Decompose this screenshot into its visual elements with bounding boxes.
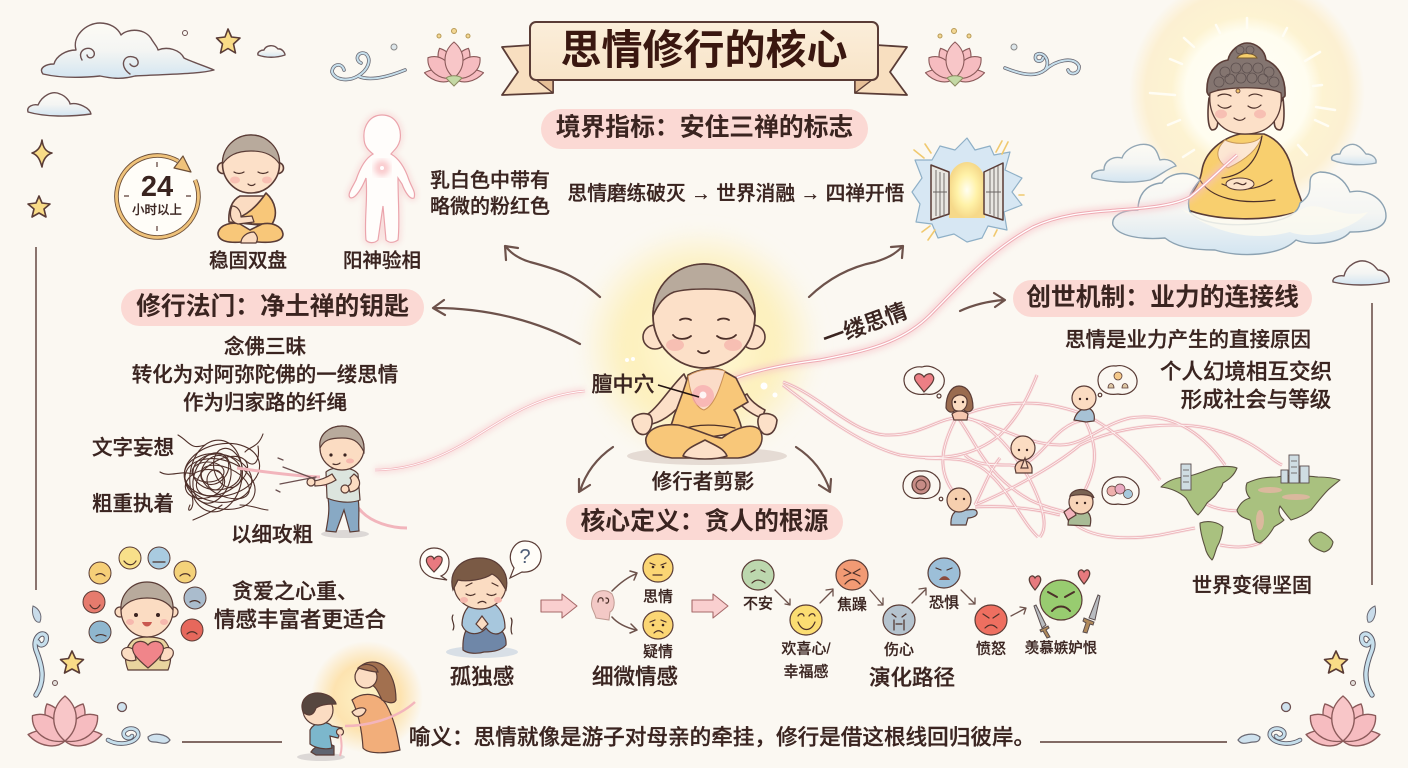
- heading: practice method: 修行法门：净土禅的钥匙: [136, 292, 409, 320]
- bottom left line: [182, 741, 282, 743]
- heading: realm indicators: [541, 109, 868, 149]
- monk with emotion bubbles: [83, 547, 206, 670]
- mother: [352, 694, 400, 753]
- cloud seat: [1113, 172, 1386, 255]
- pink thread to the left: [375, 391, 585, 470]
- decoration: bottom right corner: [1238, 606, 1382, 749]
- text: milky white with pink: 乳白色中带有: [430, 169, 550, 192]
- pointer line: [658, 385, 699, 397]
- heading: realm indicators: 境界指标：安住三禅的标志: [556, 114, 853, 142]
- decoration: swirl near title left: [332, 44, 405, 79]
- title banner: [502, 22, 907, 95]
- label: fine over gross: 以细攻粗: [231, 524, 313, 546]
- decoration: swirl near title right: [1005, 44, 1079, 74]
- australia: [1309, 532, 1333, 552]
- central monk glow: [580, 227, 820, 463]
- halo: [1129, 0, 1365, 210]
- glow: [311, 641, 423, 753]
- small arrows: [775, 588, 1026, 616]
- face: thought: [643, 554, 673, 582]
- text: milky white with pink: [430, 169, 550, 218]
- label: envy and hate: 羡慕嫉妒恨: [1025, 640, 1097, 657]
- label: practitioner silhouette: 修行者剪影: [652, 470, 754, 494]
- central monk: [625, 264, 787, 465]
- swords: [1034, 595, 1100, 638]
- face: agitation: [836, 560, 868, 590]
- south america: [1200, 522, 1223, 560]
- thread through scissors: [237, 468, 407, 528]
- body: [463, 622, 506, 653]
- arrow: to practice: [433, 300, 580, 344]
- thread network: [783, 375, 1282, 547]
- face: joy: [790, 605, 822, 635]
- text: suitable for emotional people: 情感丰富者更适合: [214, 608, 386, 632]
- label: 小时以上: [132, 203, 182, 217]
- speech bubble: question: [510, 541, 541, 578]
- chart: emotion evolution path: [742, 558, 1100, 680]
- africa and eurasia: [1237, 475, 1340, 543]
- text: buddha recitation: [132, 334, 398, 414]
- label: word delusion: 文字妄想: [92, 436, 174, 460]
- text: suitable for emotional people: 贪爱之心重、: [232, 580, 358, 604]
- block arrow 1: [541, 594, 577, 618]
- arrow: to thought: [612, 571, 637, 591]
- text: metaphor: 喻义：思情就像是游子对母亲的牵挂，修行是借这根线回归彼岸。: [409, 724, 1035, 750]
- hearts: [1029, 570, 1090, 590]
- north america: [1161, 466, 1237, 515]
- heart: [133, 641, 163, 668]
- icon: head with swirl: [591, 591, 614, 620]
- text: karma direct cause: 思情是业力产生的直接原因: [1065, 328, 1311, 352]
- label: unease: 不安: [743, 596, 773, 612]
- label: a strand of thought: 一缕思情: [819, 298, 911, 352]
- heading: core definition: [566, 504, 843, 540]
- text: milky white with pink: 略微的粉红色: [430, 195, 550, 218]
- arrow: down right: [796, 447, 831, 492]
- decoration: bottom left corner: [26, 606, 170, 749]
- head: [653, 264, 755, 368]
- label: doubt feeling: 疑情: [643, 644, 673, 660]
- ears: [643, 325, 667, 349]
- face: anger: [975, 605, 1007, 635]
- heading: creation mechanism: 创世机制：业力的连接线: [1026, 284, 1299, 312]
- arrow: to doubt: [612, 617, 637, 633]
- label: loneliness: 孤独感: [450, 665, 514, 689]
- label: joy: 幸福感: [783, 664, 829, 680]
- text: suitable for emotional people: [214, 580, 386, 632]
- label: agitation: 焦躁: [837, 596, 867, 614]
- decoration: right small cloud: [1333, 261, 1389, 285]
- label: sadness: 伤心: [884, 642, 914, 658]
- tangle of thoughts: [160, 434, 268, 520]
- person: boy with tangle bubble: [903, 471, 977, 525]
- Buddha on cloud: [1092, 0, 1386, 255]
- label: joy: 欢喜心/: [781, 640, 831, 658]
- face: sadness: [883, 605, 915, 635]
- head: [1208, 98, 1284, 130]
- speech bubble: heart: [420, 548, 449, 580]
- panel: clock 24 hours: [116, 155, 198, 237]
- face: unease: [742, 560, 774, 590]
- label: subtle emotion: 细微情感: [592, 665, 678, 689]
- icon: opening doors: [912, 138, 1024, 242]
- child: [297, 753, 345, 761]
- head: [454, 561, 506, 609]
- right side cloud: [1332, 144, 1376, 165]
- icon: lotus top right: [924, 28, 986, 86]
- text: illusions interweave: 个人幻境相互交织: [1160, 360, 1332, 384]
- arrow: to realm: [505, 246, 600, 297]
- arms: [648, 374, 692, 424]
- person: centre praying: [1011, 436, 1035, 473]
- icon: small seated monk: [218, 135, 284, 243]
- heading: practice method: [121, 289, 424, 326]
- block arrow 2: [692, 594, 728, 618]
- label: evolution path: 演化路径: [869, 666, 955, 690]
- label: world becomes solid: 世界变得坚固: [1192, 574, 1312, 597]
- boy with scissors: [276, 426, 369, 538]
- legs: [646, 425, 762, 458]
- text: buddha recitation: 转化为对阿弥陀佛的一缕思情: [132, 364, 398, 386]
- title text: 思情修行的核心: [560, 27, 848, 73]
- lonely boy: [420, 541, 541, 658]
- label: yang spirit verification: 阳神验相: [343, 250, 421, 272]
- face: envy and hate: [1040, 580, 1082, 620]
- label: gross attachment: 粗重执着: [92, 492, 174, 516]
- face: doubt: [643, 611, 673, 639]
- label: fear: 恐惧: [929, 594, 959, 612]
- hands: [632, 414, 652, 434]
- label: joy: [781, 640, 831, 680]
- bottom right line: [1040, 741, 1227, 743]
- shadow: [627, 447, 787, 465]
- icon: scissors: [276, 458, 316, 492]
- face: [673, 318, 736, 353]
- pink thread to buddha: [700, 155, 1237, 397]
- chest: [688, 369, 725, 410]
- text: buddha recitation: 作为归家路的纤绳: [183, 392, 347, 414]
- right border line: [1371, 303, 1373, 585]
- label: anger: 愤怒: [976, 640, 1006, 658]
- person: man with bubble: [1064, 477, 1139, 526]
- text: illusions interweave: 形成社会与等级: [1181, 388, 1331, 412]
- sparkles: [625, 357, 778, 398]
- arrow: to creation: [960, 293, 1005, 311]
- foot: [683, 440, 727, 459]
- person: girl with heart bubble: [904, 366, 973, 420]
- icon: lotus top left: [423, 28, 485, 86]
- left side cloud: [1092, 144, 1176, 182]
- robe: [668, 369, 748, 437]
- lonely boy: ?: [519, 546, 531, 568]
- heading: creation mechanism: [1013, 280, 1312, 317]
- ribbon: [345, 702, 415, 726]
- decoration: top left clouds and stars: [28, 23, 285, 217]
- label: stable double lotus: 稳固双盘: [209, 249, 287, 272]
- cheeks: [666, 339, 742, 351]
- icon: pink luminous body: [349, 115, 415, 243]
- label: thought feeling: 思情: [643, 588, 673, 606]
- head: [115, 607, 125, 617]
- robe: [1183, 134, 1303, 219]
- person: bald with group bubble: [1072, 366, 1137, 422]
- body: [125, 637, 171, 670]
- arrow: down left: [579, 447, 613, 492]
- world map: [1161, 455, 1340, 560]
- left border line: [35, 247, 37, 590]
- text: buddha recitation: 念佛三昧: [224, 334, 306, 358]
- building icons: [1181, 455, 1309, 490]
- emotion bubbles: [83, 547, 206, 643]
- label: danzhong acupoint: 膻中穴: [592, 374, 654, 396]
- number 24: 24: [141, 171, 173, 203]
- face: fear: [928, 558, 960, 588]
- arrow: to door: [809, 246, 903, 297]
- heading: core definition: 核心定义：贪人的根源: [581, 508, 829, 536]
- mother and child: [297, 641, 423, 761]
- text: illusions interweave: [1160, 360, 1332, 412]
- text: realm path: 思情磨练破灭 → 世界消融 → 四禅开悟: [568, 183, 904, 205]
